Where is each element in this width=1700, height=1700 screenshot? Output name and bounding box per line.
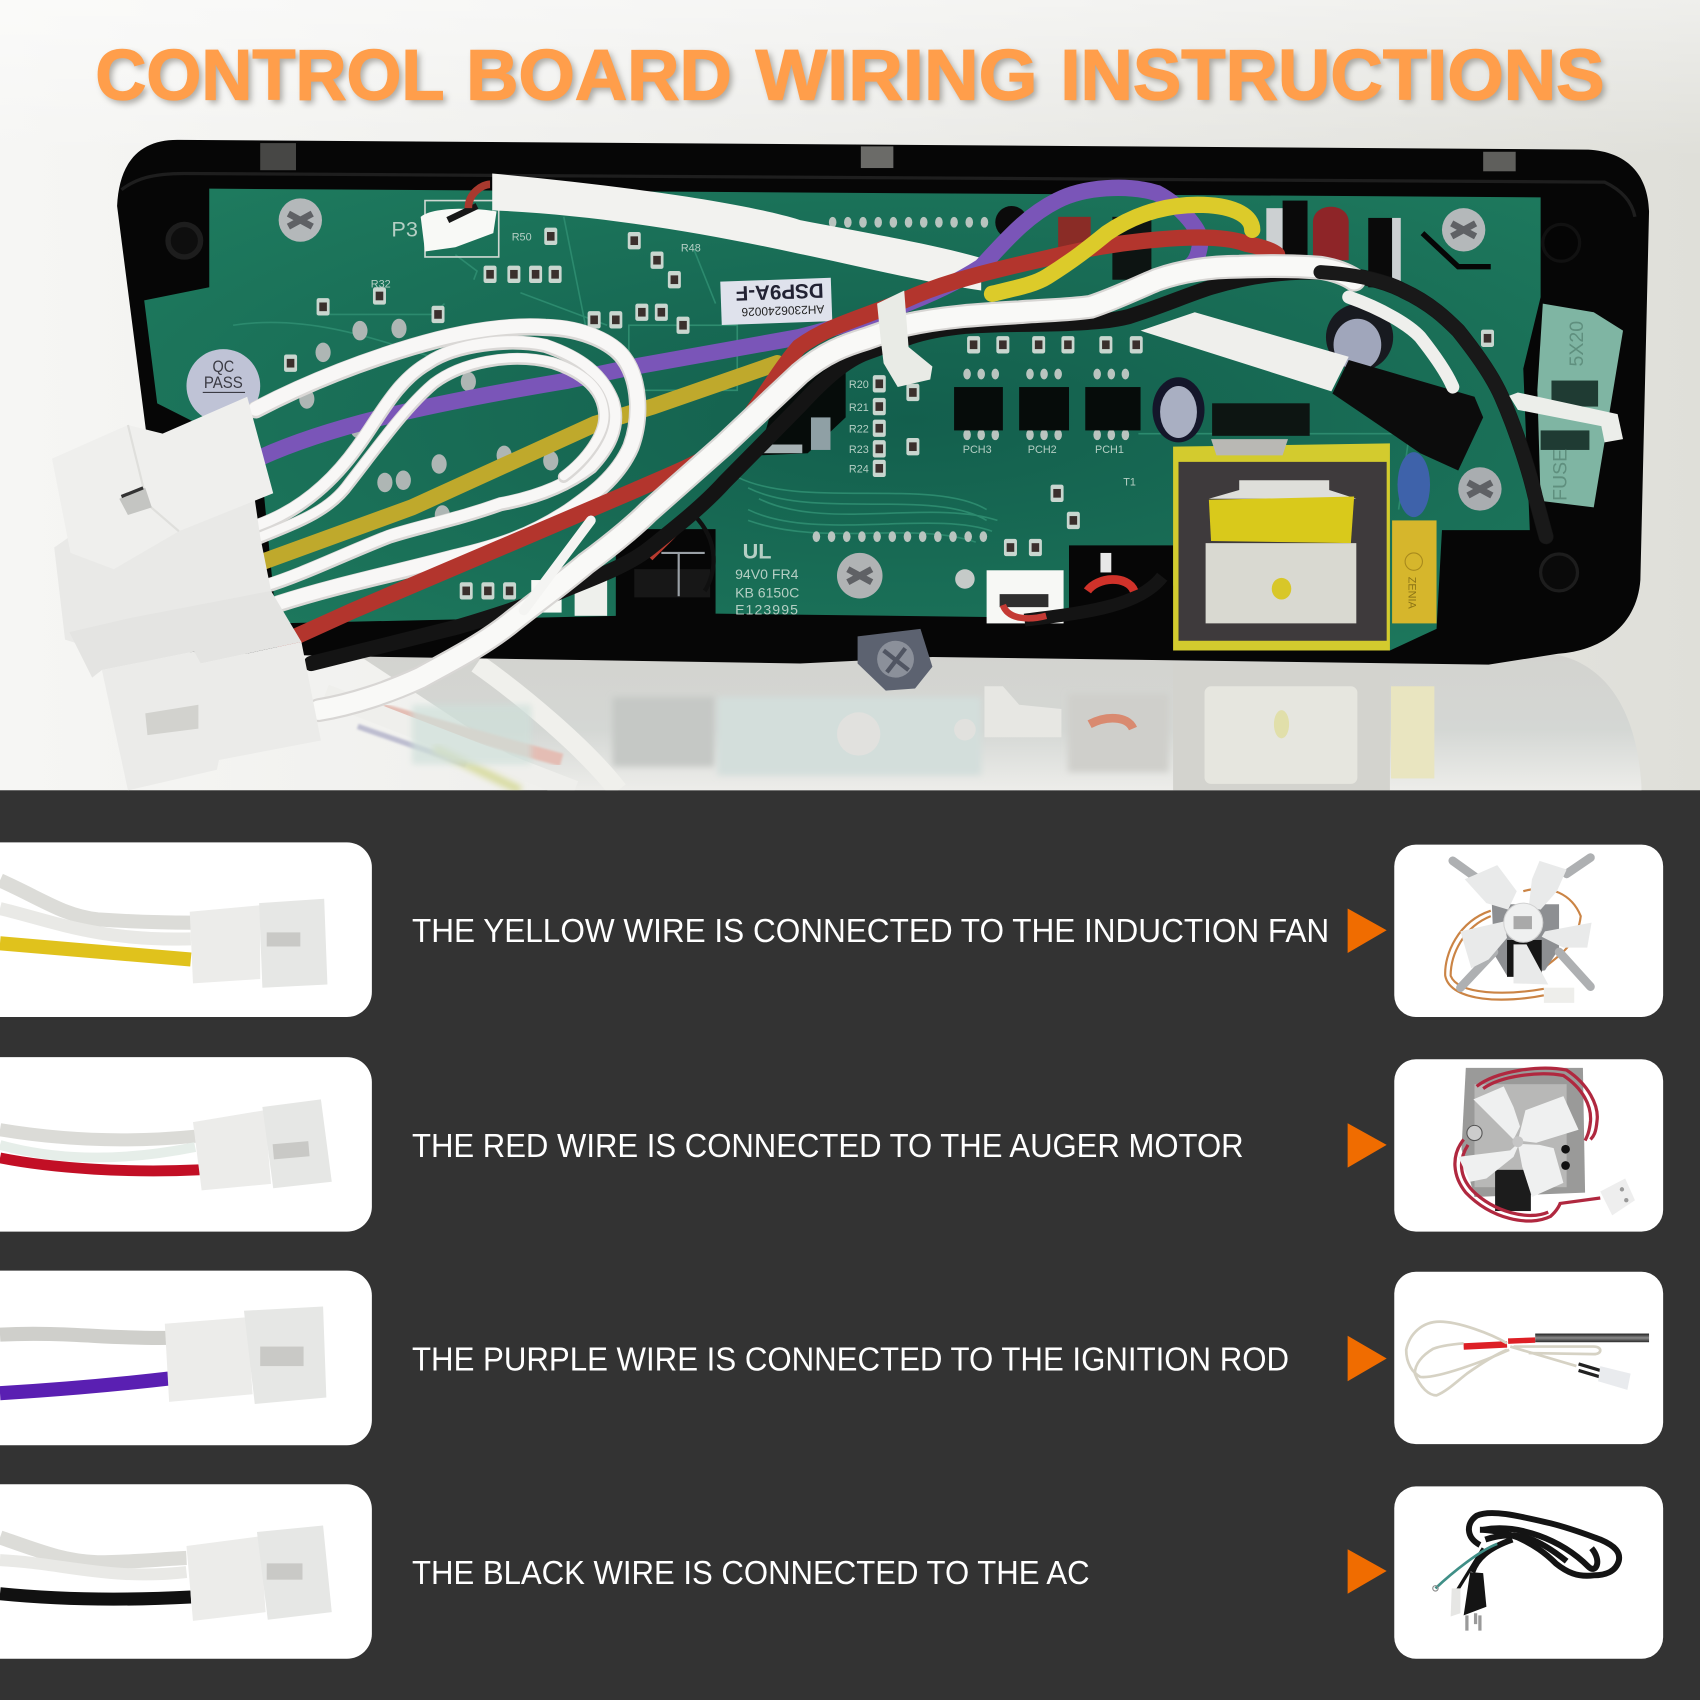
model label: DSP9A-F	[735, 278, 824, 305]
arrow	[1348, 1123, 1387, 1168]
row: yellow wire	[0, 842, 1663, 1017]
title: CONTROL	[99, 39, 448, 119]
board silkscreen labels: PCH1	[1095, 444, 1124, 456]
wire connectors: main harness	[52, 397, 321, 790]
text: purple wire: THE PURPLE WIRE IS CONNECTED TO THE IGNITION ROD	[412, 1341, 1289, 1378]
wire: black over right span	[1321, 272, 1546, 537]
cable tie: centre	[877, 291, 932, 387]
photo backdrop	[0, 0, 1700, 790]
model label	[720, 278, 832, 325]
board silkscreen labels: P3	[391, 216, 418, 241]
connector card: purple	[0, 1271, 372, 1445]
board silkscreen labels: KB 6150C	[735, 584, 799, 600]
fuse holder: FUSE	[1550, 449, 1572, 501]
board silkscreen labels: UL	[743, 538, 772, 563]
auger motor photo card	[1394, 1059, 1663, 1232]
QC pass sticker: QC	[212, 358, 234, 376]
board silkscreen labels: R32	[371, 278, 391, 290]
board silkscreen labels: R20	[849, 379, 869, 391]
black plug on sleeve	[1332, 360, 1483, 471]
white sockets	[421, 184, 1064, 623]
title: CONTROL	[95, 36, 445, 116]
screws	[279, 198, 1502, 598]
power cord photo card	[1394, 1486, 1663, 1659]
chips	[759, 201, 1392, 455]
connector: middle	[54, 477, 278, 664]
fuse holder	[1537, 304, 1623, 507]
cable tie: fuse	[1509, 392, 1623, 442]
board silkscreen labels: R24	[849, 464, 869, 476]
floor reflection of the board	[325, 655, 1641, 790]
board silkscreen labels: R50	[512, 232, 532, 244]
heat-sink plates	[1266, 208, 1401, 287]
arrow	[1348, 1336, 1387, 1381]
QC pass sticker	[186, 349, 260, 423]
wire: black	[311, 272, 1546, 664]
housing details	[121, 143, 1635, 691]
circuit board components	[186, 184, 1502, 623]
board silkscreen labels: R48	[681, 243, 701, 255]
wire: red	[284, 238, 1277, 642]
circuit board traces	[233, 201, 1409, 542]
row: purple wire	[0, 1271, 1663, 1445]
board silkscreen labels: R22	[849, 424, 869, 436]
panel: green circuit board	[144, 189, 1541, 651]
wire: white loops	[256, 326, 638, 604]
board silkscreen labels: T1	[1123, 477, 1136, 489]
board silkscreen labels: R21	[849, 402, 869, 414]
row: red wire	[0, 1057, 1663, 1232]
connector: top	[52, 397, 273, 569]
title: BOARD	[466, 36, 732, 116]
model label: AH2306240026	[741, 302, 825, 319]
text: red wire: THE RED WIRE IS CONNECTED TO THE AUGER MOTOR	[412, 1128, 1244, 1165]
board silkscreen labels: PCH2	[1028, 444, 1057, 456]
arrow	[1348, 1549, 1387, 1594]
title: INSTRUCTIONS	[1060, 36, 1605, 116]
ignition rod photo card	[1394, 1272, 1663, 1444]
wire: white bundle	[319, 266, 1453, 710]
capacitors	[1058, 207, 1430, 517]
lower panel background	[0, 790, 1700, 1700]
notch jumper wires	[634, 515, 1162, 620]
title: INSTRUCTIONS	[1064, 39, 1608, 119]
title: BOARD	[469, 39, 735, 119]
wire: yellow right run	[992, 205, 1252, 294]
connector card: black	[0, 1484, 372, 1659]
wire: purple	[260, 188, 1201, 458]
QC pass sticker: PASS	[204, 374, 243, 392]
transformer: ZENIA	[1405, 577, 1417, 609]
transformer	[1173, 439, 1437, 651]
board silkscreen labels	[371, 216, 1136, 618]
board slot	[1422, 233, 1491, 267]
wires: braided white sleeve	[492, 173, 1349, 391]
text: black wire: THE BLACK WIRE IS CONNECTED TO THE AC	[412, 1555, 1090, 1592]
housing: black enclosure	[117, 140, 1649, 665]
surface mount pads	[284, 228, 1494, 600]
wire: yellow left run	[260, 363, 777, 563]
fuse holder: 5X20	[1566, 321, 1588, 366]
title: WIRING	[756, 36, 1038, 116]
board silkscreen labels: PCH3	[963, 444, 992, 456]
connector: bottom	[69, 591, 321, 790]
title	[95, 36, 1608, 119]
title: WIRING	[759, 39, 1041, 119]
fan photo card	[1394, 845, 1663, 1017]
board silkscreen labels: E123995	[735, 602, 798, 618]
board silkscreen labels: 94V0 FR4	[735, 566, 799, 582]
board silkscreen labels: R23	[849, 444, 869, 456]
arrow	[1348, 909, 1387, 953]
text: yellow wire: THE YELLOW WIRE IS CONNECTED TO THE INDUCTION FAN	[412, 913, 1329, 950]
connector card: red	[0, 1057, 372, 1232]
row: black wire	[0, 1484, 1663, 1659]
connector card: yellow	[0, 842, 372, 1017]
solder joints	[299, 217, 1129, 542]
